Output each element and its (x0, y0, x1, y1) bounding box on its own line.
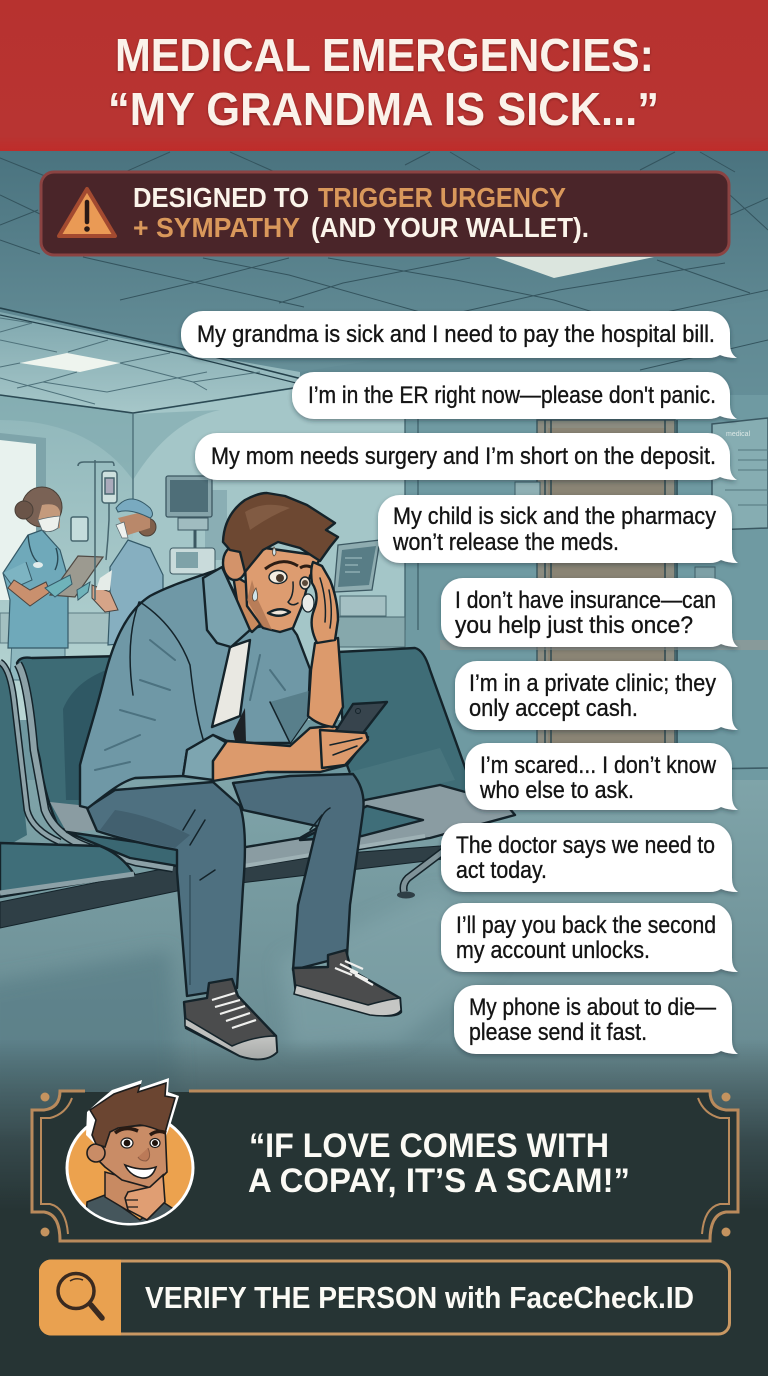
near shoe (184, 979, 277, 1059)
sleeve folds (95, 640, 285, 770)
bubble 5 (441, 578, 738, 647)
background nurse in cap (92, 499, 163, 645)
ceiling lights (20, 257, 654, 372)
bubble 9: I’ll pay you back the second (456, 912, 716, 939)
bubble 6 (455, 661, 738, 730)
t-shirt (212, 640, 250, 727)
left seat (0, 843, 134, 897)
quote text: “IF LOVE COMES WITH (249, 1127, 609, 1165)
call to action text: VERIFY THE PERSON with FaceCheck.ID (145, 1280, 694, 1315)
face (245, 548, 322, 632)
right chair back (338, 648, 475, 812)
background nurse with clipboard (3, 487, 103, 680)
jacket (80, 568, 310, 808)
bubble 8 (441, 823, 738, 892)
ornate frame (32, 1091, 738, 1241)
warning text: (AND YOUR WALLET). (311, 212, 589, 243)
background computer and counter (334, 540, 405, 647)
left chair back (17, 656, 125, 830)
icon: warning triangle (59, 189, 115, 236)
hair (223, 493, 338, 572)
warning text: + SYMPATHY (133, 212, 300, 243)
ceiling (0, 150, 768, 415)
floor (0, 780, 768, 1210)
chair far left (0, 662, 27, 850)
bubble 7: I’m scared... I don’t know (480, 752, 716, 779)
bubble 6: only accept cash. (469, 695, 638, 722)
warning text: TRIGGER URGENCY (318, 182, 566, 213)
bubble 8: act today. (456, 857, 547, 884)
forearm and hand holding phone (213, 702, 387, 781)
near leg (87, 782, 245, 996)
head (223, 493, 338, 632)
bubble 10: please send it fast. (469, 1019, 647, 1046)
raised forearm (308, 638, 343, 727)
bubble 1: My grandma is sick and I need to pay the hospital bill. (197, 321, 715, 348)
right seat (240, 785, 515, 868)
header banner (0, 0, 768, 151)
IV pole and drip bag (71, 460, 117, 600)
left doorway window (0, 433, 46, 600)
arm gap (270, 690, 312, 743)
waiting room seating row (0, 648, 520, 928)
rolled cuff (183, 735, 227, 780)
avatar: smiling man thinking (67, 1078, 193, 1230)
warning text: DESIGNED TO (133, 182, 309, 213)
bubble 3: My mom needs surgery and I’m short on the deposit. (211, 443, 716, 470)
bubble 10: My phone is about to die— (469, 994, 716, 1021)
title (108, 29, 659, 135)
bubble 9 (441, 903, 738, 972)
walls (0, 385, 768, 780)
bubble 3 (195, 433, 737, 480)
warning banner (41, 172, 729, 255)
wall notice board: medical (726, 431, 751, 438)
bubble 6: I’m in a private clinic; they (469, 670, 717, 697)
warning text (133, 182, 589, 243)
quote panel (32, 1078, 738, 1241)
bubble 10 (454, 985, 738, 1054)
title: “MY GRANDMA IS SICK...” (108, 83, 659, 135)
bubble 7: who else to ask. (479, 777, 634, 804)
background counter (0, 613, 120, 643)
collar (203, 567, 250, 647)
corridor doors at right (440, 420, 768, 773)
bubble 4: My child is sick and the pharmacy (393, 503, 717, 530)
bubble 2 (292, 372, 737, 419)
seat beam (0, 832, 520, 928)
bubble 5: you help just this once? (455, 612, 693, 639)
quote text: A COPAY, IT’S A SCAM!” (248, 1162, 630, 1200)
scam message bubbles (181, 311, 738, 1054)
bubble 5: I don’t have insurance—can (455, 587, 716, 614)
bubble 7 (465, 743, 738, 810)
ear (223, 546, 247, 580)
hospital waiting room background (0, 150, 768, 1210)
bottom dark fade (0, 1040, 768, 1210)
background monitor and equipment (166, 476, 227, 574)
avatar hair outline (86, 1078, 179, 1145)
bubble 4: won’t release the meds. (392, 529, 619, 556)
far leg (233, 774, 364, 970)
title: MEDICAL EMERGENCIES: (115, 29, 654, 81)
call to action bar (39, 1260, 730, 1336)
bubble 1 (181, 311, 737, 358)
clipboard (50, 556, 103, 597)
icon: magnifying glass (58, 1274, 102, 1318)
bubble 9: my account unlocks. (456, 937, 650, 964)
bubble 8: The doctor says we need to (456, 832, 715, 859)
quote text (248, 1127, 630, 1200)
eyes and brows (269, 570, 287, 584)
neck (233, 575, 265, 632)
phone at ear (302, 594, 314, 612)
distressed man on phone (80, 493, 401, 1059)
far shoe (293, 950, 401, 1016)
bubble 4 (378, 495, 738, 563)
hand on head (311, 562, 338, 643)
chair leg (404, 850, 445, 892)
sweat drops (252, 547, 276, 601)
wall notice board (712, 418, 768, 530)
